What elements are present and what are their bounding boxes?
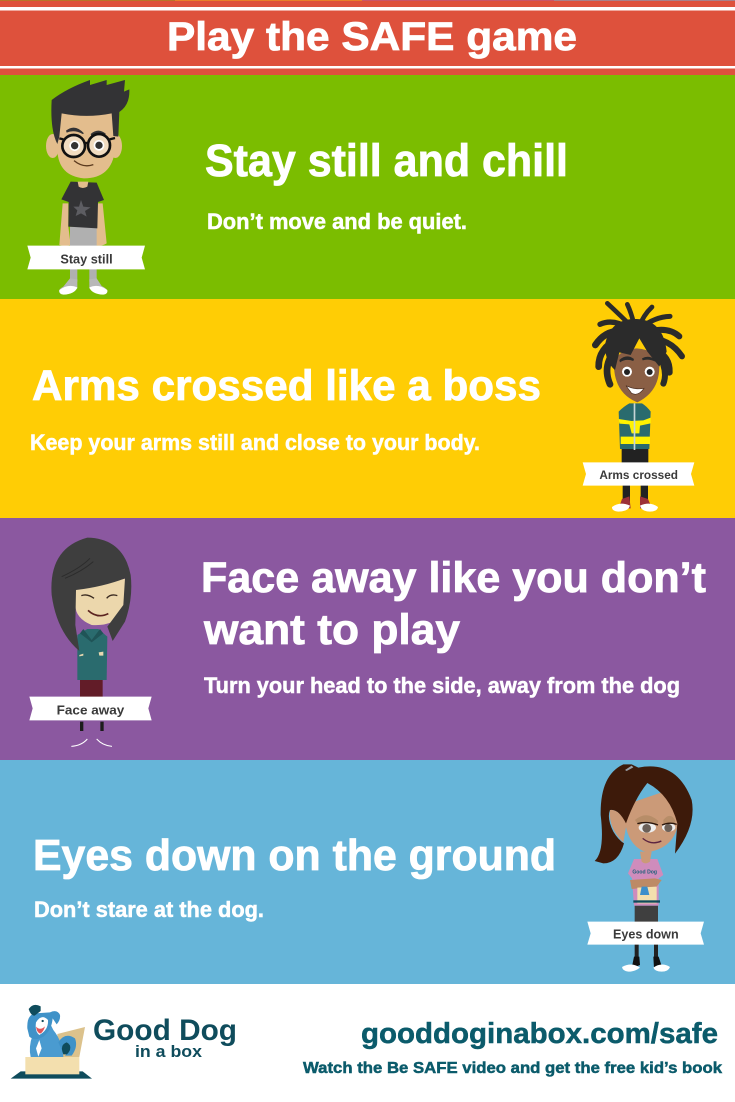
title: Play the SAFE game: [167, 15, 577, 59]
text: eyes down description: Don’t stare at the dog.: [34, 897, 264, 922]
logo: good dog in a box: [11, 1005, 237, 1079]
character: child with dreadlocks: [583, 303, 694, 512]
panel: face away: [0, 518, 735, 760]
label ribbon: face away: Face away: [57, 703, 124, 717]
website url: gooddoginabox.com/safe: [361, 1018, 718, 1050]
heading: arms crossed like a boss: Arms crossed like a boss: [32, 362, 541, 410]
text: stay still description: Don’t move and be quiet.: [207, 209, 467, 234]
panel: arms crossed: [0, 299, 735, 518]
label ribbon: stay still: [27, 246, 145, 269]
heading: face away like you don't want to play: want to play: [203, 606, 460, 654]
label ribbon: arms crossed: [583, 462, 694, 486]
heading: face away like you don't want to play: [201, 554, 706, 654]
text: arms crossed description: Keep your arms still and close to your body.: [30, 430, 480, 455]
label ribbon: stay still: Stay still: [60, 252, 113, 266]
label ribbon: eyes down: Eyes down: [613, 927, 679, 941]
heading: eyes down on the ground: Eyes down on the ground: [33, 831, 556, 880]
heading: stay still and chill: Stay still and chill: [205, 135, 568, 186]
icon: dog in box: [11, 1005, 92, 1079]
character: girl with ponytail: [587, 764, 704, 972]
logo wordmark: Good Dog: [93, 1014, 237, 1047]
panel: stay still: [0, 75, 735, 299]
label ribbon: face away: [29, 697, 152, 720]
panel: eyes down: [0, 760, 735, 984]
text: face away description: Turn your head to the side, away from the dog: [204, 673, 680, 698]
label ribbon: arms crossed: Arms crossed: [599, 468, 678, 482]
label ribbon: eyes down: [587, 922, 704, 945]
call to action: Watch the Be SAFE video and get the free kid’s book: [303, 1060, 722, 1077]
character: girl with ponytail: Good Dog: [632, 870, 657, 876]
footer: [11, 1005, 722, 1079]
header banner: [0, 0, 735, 75]
heading: face away like you don't want to play: Face away like you don’t: [201, 554, 706, 602]
character: girl with dark bob: [29, 538, 152, 746]
logo: good dog in a box: in a box: [135, 1042, 203, 1061]
character: boy with glasses: [27, 80, 145, 295]
